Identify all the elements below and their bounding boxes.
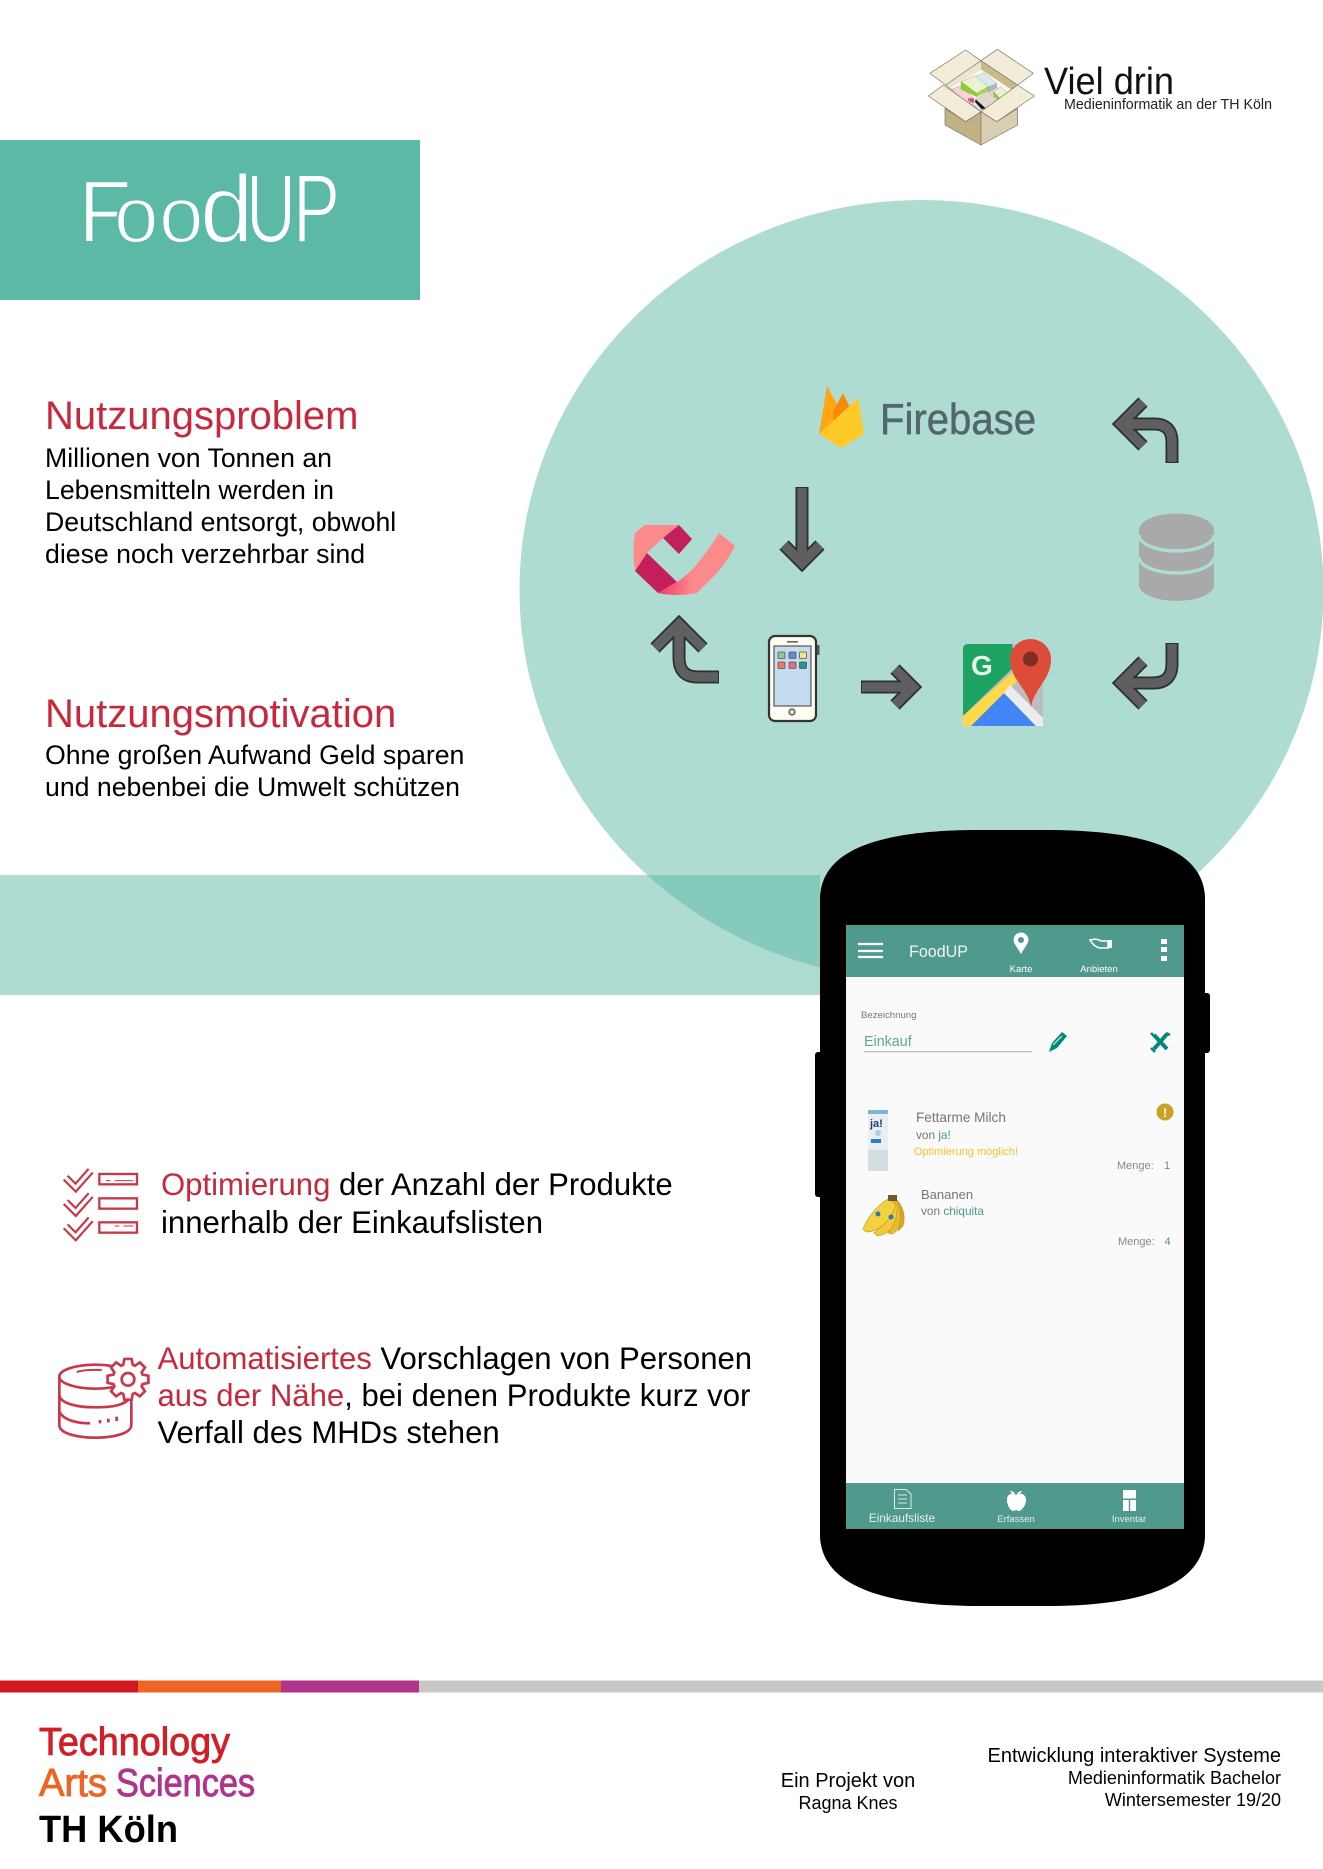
- feature: Automatisiertes: [59, 1341, 752, 1450]
- course info: Entwicklung interaktiver Systeme: [988, 1745, 1281, 1767]
- feature text: Verfall des MHDs stehen: [158, 1415, 500, 1450]
- body text: [45, 443, 396, 569]
- body text: [45, 740, 464, 802]
- logo: TH Köln: Sciences: [116, 1762, 255, 1805]
- course info: Medieninformatik Bachelor: [1068, 1768, 1281, 1788]
- warning badge: !: [1163, 1106, 1167, 1120]
- icon: pink ribbon logo: [634, 525, 735, 595]
- background ellipse: [520, 200, 1323, 980]
- item brand: von chiquita: [921, 1204, 984, 1218]
- app name: FoodUP: [909, 942, 968, 961]
- label: Erfassen: Erfassen: [997, 1514, 1035, 1525]
- product image: milk carton: ja!: [869, 1118, 883, 1130]
- logo: TH Köln: TH Köln: [39, 1809, 178, 1851]
- body text: und nebenbei die Umwelt schützen: [45, 772, 460, 802]
- feature: Optimierung: [65, 1167, 673, 1240]
- title banner: U: [246, 154, 296, 263]
- icon: map pin: [1014, 933, 1028, 954]
- project credit: Ein Projekt von: [781, 1770, 915, 1792]
- label: Karte: Karte: [1010, 964, 1032, 975]
- icon: google maps: [963, 639, 1051, 726]
- icon: smartphone: [769, 636, 820, 721]
- feature text: Optimierung der Anzahl der Produkte: [161, 1167, 673, 1202]
- item quantity: Menge:: [1118, 1236, 1155, 1248]
- logo: Viel drin: [928, 49, 1272, 145]
- feature: Optimierung: innerhalb der Einkaufslisten: [161, 1205, 543, 1240]
- app screen: [846, 925, 1184, 1529]
- architecture diagram: [634, 386, 1214, 726]
- icon: inventory: [1123, 1490, 1136, 1511]
- footer colour bar: [0, 1680, 1323, 1692]
- title banner: P: [293, 154, 340, 263]
- title banner: o: [159, 170, 204, 259]
- arrow: firebase down: [784, 487, 820, 563]
- body text: Deutschland entsorgt, obwohl: [45, 507, 396, 537]
- icon: apple: [1007, 1491, 1026, 1511]
- project credit: [781, 1770, 915, 1813]
- field label: Bezeichnung: [861, 1010, 916, 1021]
- list item: milk: [868, 1104, 1174, 1172]
- label: Inventar: Inventar: [1112, 1514, 1146, 1525]
- title banner: d: [200, 156, 253, 263]
- icon: pencil: [1049, 1032, 1067, 1052]
- product image: milk carton: [868, 1110, 888, 1171]
- arrow: database from maps: [1121, 643, 1172, 705]
- arrow: phone to maps: [861, 669, 913, 705]
- arrow: up to ribbon: [655, 624, 719, 677]
- heading: Nutzungsproblem: [45, 394, 358, 438]
- heading: Nutzungsmotivation: [45, 692, 396, 736]
- firebase wordmark: Firebase: [880, 395, 1036, 444]
- logo: TH Köln: [39, 1721, 255, 1851]
- background band: [0, 875, 820, 995]
- feature text: Automatisiertes Vorschlagen von Personen: [158, 1341, 752, 1376]
- icon: firebase flame: [819, 386, 864, 448]
- body text: Millionen von Tonnen an: [45, 443, 332, 473]
- phone side buttons: [815, 993, 1210, 1197]
- item quantity: 1: [1164, 1160, 1170, 1172]
- phone mockup: [815, 830, 1210, 1606]
- icon: database: [1139, 514, 1214, 601]
- item name: Bananen: [921, 1187, 973, 1202]
- icon: google maps: G: [971, 650, 993, 681]
- course info: Wintersemester 19/20: [1105, 1790, 1281, 1810]
- title banner: F: [78, 162, 132, 261]
- feature text: aus der Nähe, bei denen Produkte kurz vor: [158, 1378, 750, 1413]
- warning badge: [1156, 1104, 1174, 1120]
- icon: list document: [894, 1490, 911, 1508]
- icon: checklist: [65, 1170, 137, 1236]
- course info: [988, 1745, 1281, 1810]
- item brand: von ja!: [916, 1128, 951, 1142]
- icon: database with gear: [59, 1359, 148, 1438]
- list item: bananas: [863, 1187, 1171, 1248]
- title banner: [0, 140, 420, 300]
- icon: offering hand: [1090, 939, 1112, 948]
- label: Einkaufsliste: Einkaufsliste: [869, 1511, 936, 1525]
- item hint: Optimierung möglich!: [914, 1146, 1018, 1158]
- icon: tools: [1151, 1033, 1170, 1052]
- label: Anbieten: Anbieten: [1080, 964, 1118, 975]
- input field: Einkauf: [864, 1034, 912, 1050]
- logo title: Viel drin: [1044, 61, 1174, 103]
- body text: Lebensmitteln werden in: [45, 475, 334, 505]
- body text: Ohne großen Aufwand Geld sparen: [45, 740, 464, 770]
- item name: Fettarme Milch: [916, 1110, 1006, 1125]
- icon: overflow menu: [1161, 939, 1167, 961]
- text block: Nutzungsproblem: [45, 394, 396, 569]
- item quantity: 4: [1164, 1236, 1171, 1248]
- app bottom navigation: [846, 1483, 1184, 1529]
- text block: Nutzungsmotivation: [45, 692, 464, 802]
- logo: TH Köln: Technology: [39, 1721, 230, 1764]
- icon: hamburger menu: [858, 944, 883, 957]
- arrow: database to firebase: [1121, 402, 1172, 463]
- logo subtitle: Medieninformatik an der TH Köln: [1064, 96, 1272, 113]
- project credit: Ragna Knes: [798, 1793, 898, 1813]
- item quantity: Menge:: [1117, 1160, 1154, 1172]
- icon: cardboard box: [928, 49, 1034, 145]
- phone body: [820, 830, 1205, 1606]
- body text: diese noch verzehrbar sind: [45, 539, 365, 569]
- product image: bananas: [863, 1195, 904, 1236]
- feature text: [158, 1341, 752, 1450]
- logo: TH Köln: Arts: [39, 1762, 107, 1805]
- title banner: o: [114, 170, 158, 259]
- app top bar: [846, 925, 1184, 977]
